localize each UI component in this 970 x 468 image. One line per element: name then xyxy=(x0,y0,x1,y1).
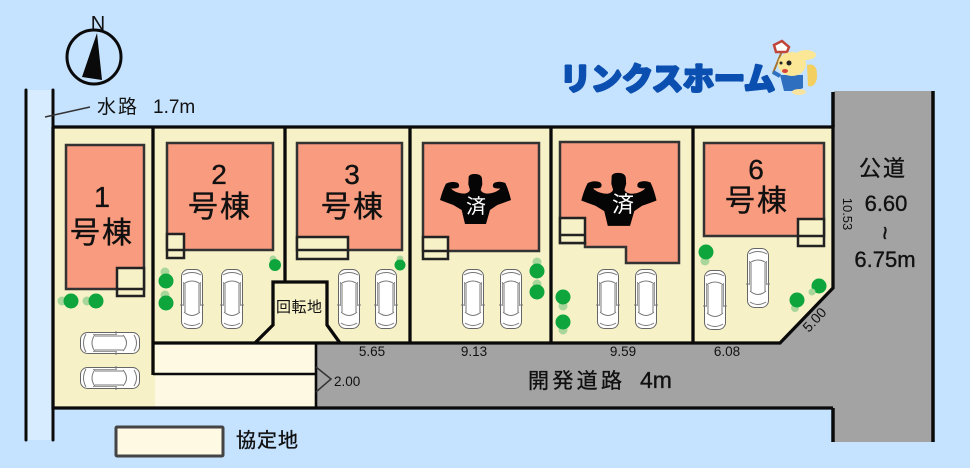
building 2: 号棟 xyxy=(188,191,250,224)
frontage dimensions xyxy=(359,344,740,359)
frontage dimensions: 6.08 xyxy=(714,344,740,359)
building 1: 号棟 xyxy=(70,217,132,250)
frontage dimensions: 9.13 xyxy=(461,344,487,359)
building 1: 1 xyxy=(94,182,110,214)
building 4 sold: 済 xyxy=(466,195,486,218)
trees xyxy=(58,244,826,334)
turnaround land xyxy=(255,282,340,343)
corner dimension: 5.00 xyxy=(799,304,830,335)
building 1 xyxy=(66,145,144,296)
logo: リンクスホーム xyxy=(560,62,775,97)
building 2: 2 xyxy=(211,159,227,190)
turnaround label: 回転地 xyxy=(276,299,322,316)
building 3: 3 xyxy=(344,159,360,190)
public road label: 公道 xyxy=(859,156,905,181)
lot land xyxy=(53,127,833,408)
width chevron xyxy=(316,367,331,392)
public road xyxy=(833,91,933,442)
building 2 xyxy=(167,143,273,258)
building 6: 6 xyxy=(748,154,764,185)
legend xyxy=(116,427,298,456)
mascot xyxy=(773,41,817,95)
public road label: ~ xyxy=(871,226,898,240)
compass: N xyxy=(91,13,105,35)
development road label: 開発道路 xyxy=(528,370,622,393)
compass xyxy=(67,13,121,84)
development road label: 4m xyxy=(640,367,672,393)
building 4 sold xyxy=(423,143,539,259)
parking cars xyxy=(80,248,770,390)
building 3: 号棟 xyxy=(321,191,383,224)
waterway label: 1.7m xyxy=(153,97,195,118)
development road label xyxy=(528,367,672,393)
building 3 xyxy=(297,143,402,259)
building 6 xyxy=(704,143,824,246)
waterway channel xyxy=(26,90,53,440)
public road label xyxy=(854,156,916,272)
building 5 sold xyxy=(560,142,679,263)
development road xyxy=(316,288,834,408)
building 5 sold: 済 xyxy=(612,192,634,217)
waterway label xyxy=(45,96,195,118)
frontage dimensions: 5.65 xyxy=(359,344,385,359)
lot boundary lines xyxy=(53,127,833,408)
road width dimension: 2.00 xyxy=(334,374,360,389)
legend: 協定地 xyxy=(236,429,298,452)
public road label: 6.60 xyxy=(865,191,907,216)
logo xyxy=(560,41,817,97)
frontage dimensions: 9.59 xyxy=(610,344,636,359)
public road label: 6.75m xyxy=(854,247,916,272)
side dimension: 10.53 xyxy=(840,198,855,230)
waterway label: 水路 xyxy=(97,96,137,118)
agreement land xyxy=(155,344,316,408)
building 6: 号棟 xyxy=(725,185,787,218)
